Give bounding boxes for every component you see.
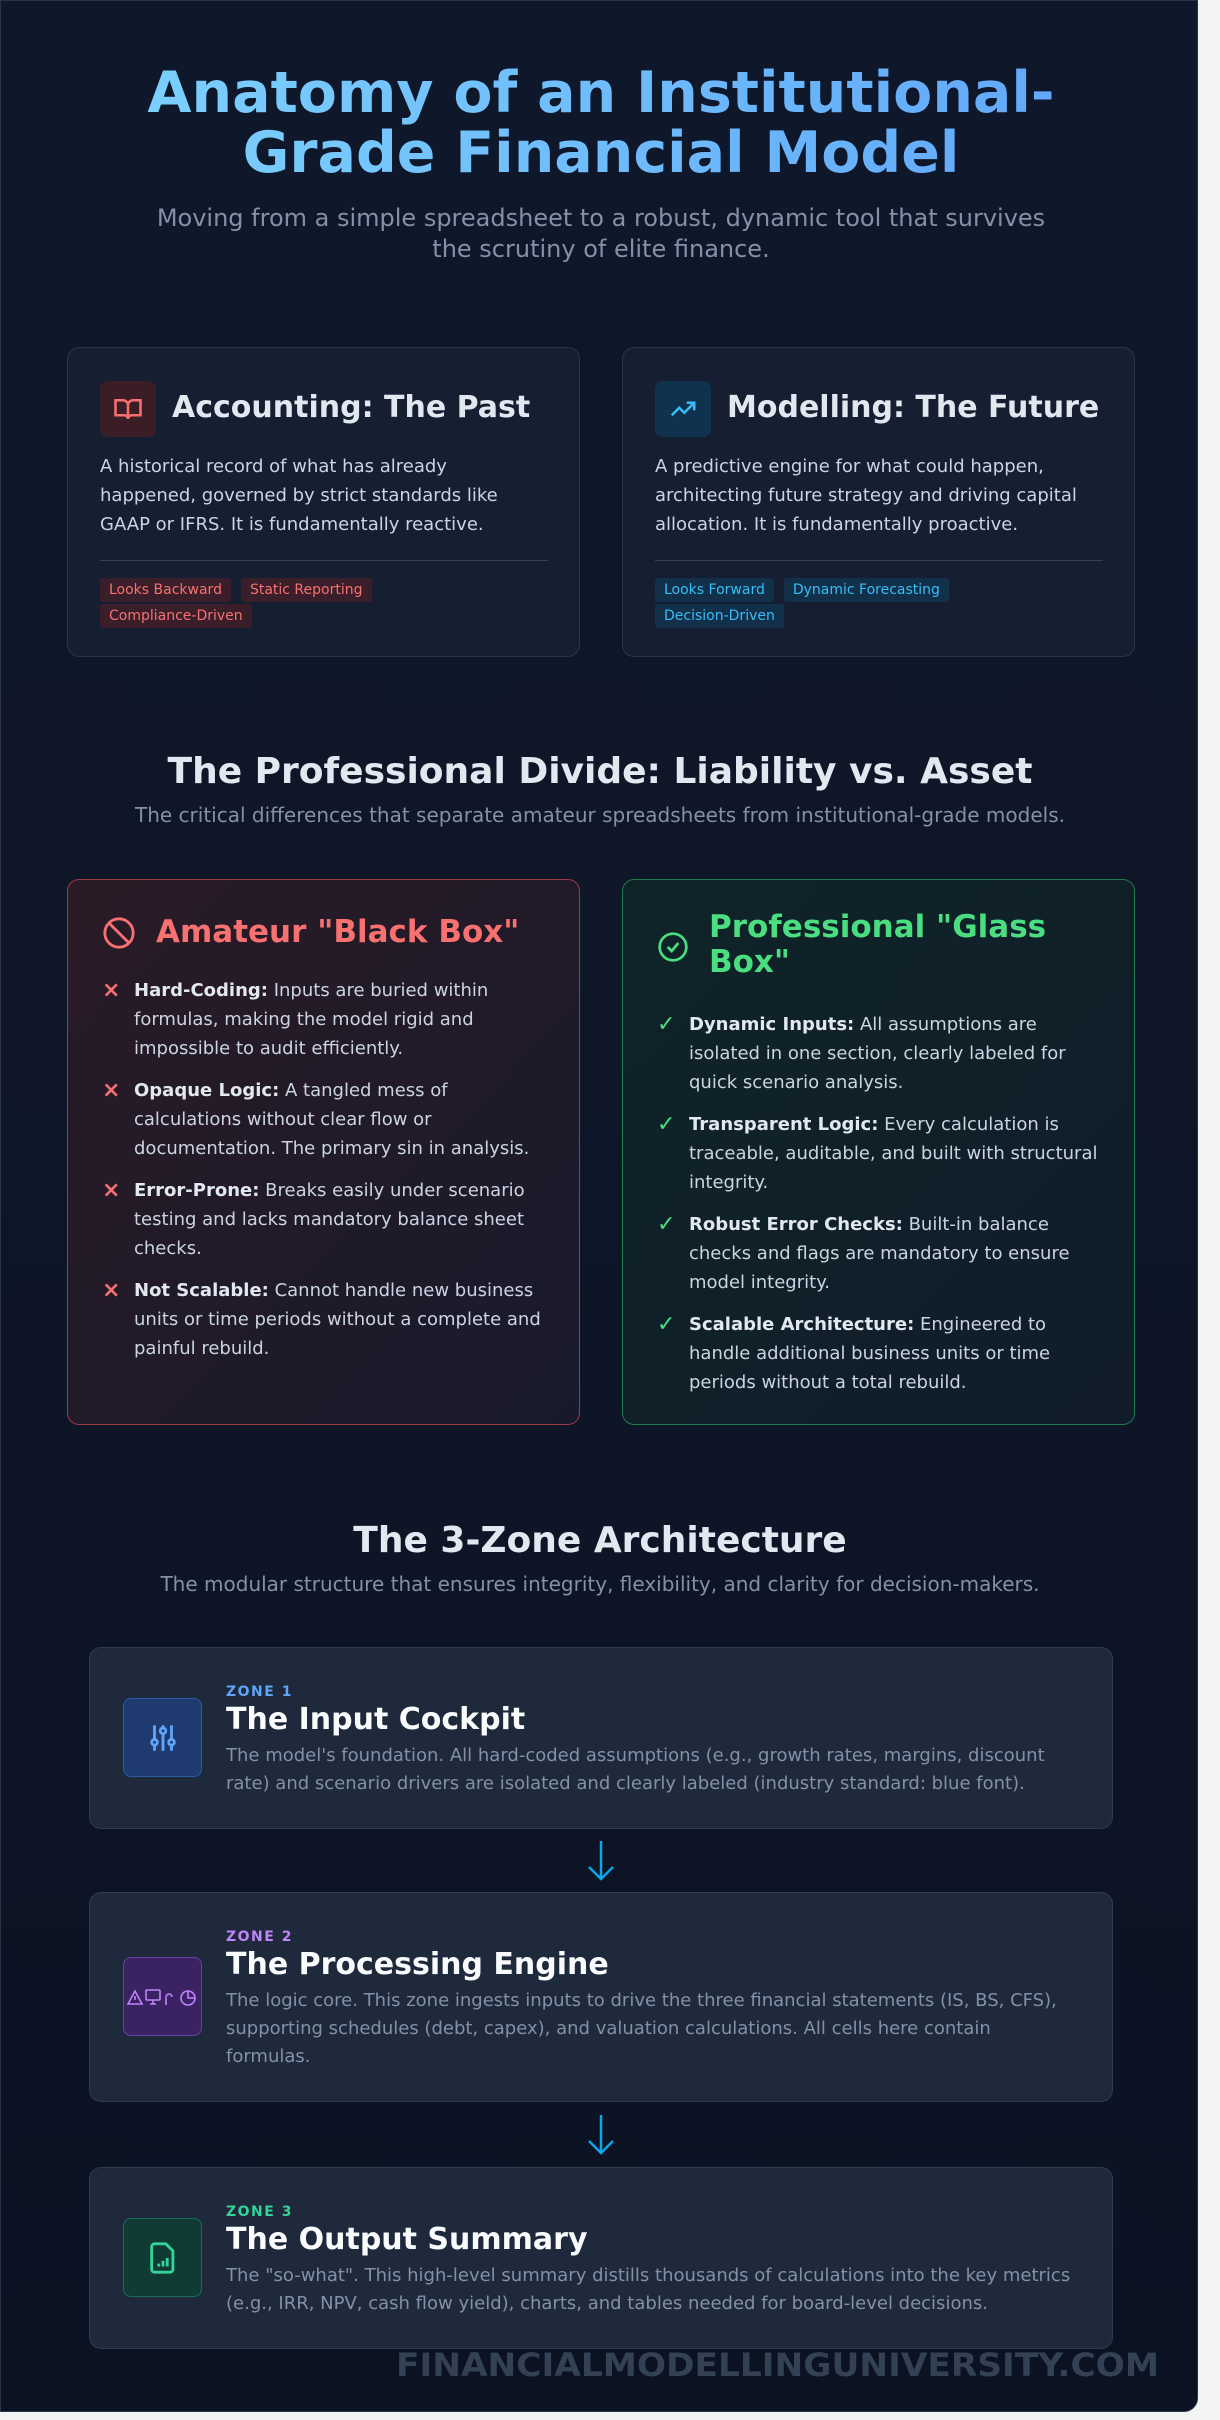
heading: Accounting: The Past: [172, 390, 530, 425]
heading: Modelling: The Future: [727, 390, 1099, 425]
tags: [100, 578, 372, 628]
zone title: The Processing Engine: [226, 1947, 609, 1982]
list: ×: [102, 1278, 120, 1303]
zone text: [226, 1990, 1057, 2067]
arrow: [588, 1841, 614, 1881]
zone 1: ZONE 1: [226, 1684, 293, 1700]
text: A historical record of what has already happened, governed by strict standards like GAAP or IFRS. It is fundamentally reactive.: [100, 456, 498, 535]
tags: Decision-Driven: [664, 608, 775, 624]
list: ×: [102, 1178, 120, 1203]
title: Anatomy of an Institutional-Grade Financial Model: [147, 60, 1055, 186]
heading: 3-zone: The 3-Zone Architecture: [353, 1520, 847, 1561]
panel: amateur: [67, 879, 580, 1425]
watermark: FINANCIALMODELLINGUNIVERSITY.COM: [396, 2346, 1159, 2383]
list: ×: [102, 978, 120, 1003]
list: ✓: [657, 1312, 675, 1337]
heading: professional divide: The Professional Divide: Liability vs. Asset: [168, 751, 1032, 792]
panel: professional: [622, 879, 1135, 1425]
zone title: The Output Summary: [226, 2222, 588, 2257]
panel: accounting: [67, 347, 580, 657]
icon: trend: [655, 381, 711, 437]
zone 2: ZONE 2: [226, 1929, 293, 1945]
list: Robust Error Checks: Built-in balance checks and flags are mandatory to ensure model integrity.: [689, 1214, 1070, 1293]
tags: Looks Backward: [109, 582, 222, 598]
panel: modelling: [622, 347, 1135, 657]
list: Hard-Coding: Inputs are buried within formulas, making the model rigid and impossible to audit efficiently.: [134, 980, 488, 1059]
arrow: [588, 2115, 614, 2155]
zone text: The logic core. This zone ingests inputs to drive the three financial statements (IS, BS, CFS), supporting schedules (debt, capex), and valuation calculations. All cells here contain: [226, 1990, 1057, 2039]
subtitle: Moving from a simple spreadsheet to a robust, dynamic tool that survives the scrutiny of elite finance.: [157, 204, 1045, 263]
list: ✓: [657, 1112, 675, 1137]
list: Not Scalable: Cannot handle new business units or time periods without a complete and painful rebuild.: [134, 1280, 541, 1359]
zone text: The model's foundation. All hard-coded assumptions (e.g., growth rates, margins, discount rate) and scenario drivers are isolated and clearly labeled (industry standard: blue font).: [226, 1745, 1045, 1794]
tags: Compliance-Driven: [109, 608, 243, 624]
tags: Static Reporting: [250, 582, 362, 598]
list: Dynamic Inputs: All assumptions are isolated in one section, clearly labeled for quick scenario analysis.: [689, 1014, 1066, 1093]
tags: [655, 578, 949, 628]
zone 3: [89, 2167, 1113, 2349]
heading: Amateur "Black Box": [156, 914, 519, 950]
zone title: The Input Cockpit: [226, 1702, 525, 1737]
text: A predictive engine for what could happen, architecting future strategy and driving capital allocation. It is fundamentally proactive.: [655, 456, 1077, 535]
list: [102, 978, 541, 1359]
zone 1: [89, 1647, 1113, 1829]
icon: report file: [123, 2218, 202, 2297]
tags: Looks Forward: [664, 582, 765, 598]
list: [657, 1012, 1097, 1393]
icon: ban: [103, 917, 135, 949]
zone 3: ZONE 3: [226, 2204, 293, 2220]
icon: check circle: [658, 932, 688, 962]
icon: book: [100, 381, 156, 437]
tags: Dynamic Forecasting: [793, 582, 940, 598]
list: Transparent Logic: Every calculation is traceable, auditable, and built with structural integrity.: [689, 1114, 1097, 1193]
list: ✓: [657, 1212, 675, 1237]
heading: Professional "Glass Box": [709, 909, 1046, 980]
subheading: The modular structure that ensures integrity, flexibility, and clarity for decision-makers.: [160, 1572, 1040, 1596]
zone 2: [89, 1892, 1113, 2102]
subheading: The critical differences that separate amateur spreadsheets from institutional-grade models.: [135, 803, 1065, 827]
list: Opaque Logic: A tangled mess of calculations without clear flow or documentation. The primary sin in analysis.: [134, 1080, 529, 1159]
zone text: The "so-what". This high-level summary distills thousands of calculations into the key metrics (e.g., IRR, NPV, cash flow yield), charts, and tables needed for board-level decisions.: [226, 2265, 1070, 2314]
icon: engine: [123, 1957, 202, 2036]
list: ✓: [657, 1012, 675, 1037]
list: ×: [102, 1078, 120, 1103]
icon: sliders: [123, 1698, 202, 1777]
zone text: formulas.: [226, 2046, 311, 2067]
list: Error-Prone: Breaks easily under scenario testing and lacks mandatory balance sheet checks.: [134, 1180, 525, 1259]
list: Scalable Architecture: Engineered to handle additional business units or time periods without a total rebuild.: [689, 1314, 1050, 1393]
